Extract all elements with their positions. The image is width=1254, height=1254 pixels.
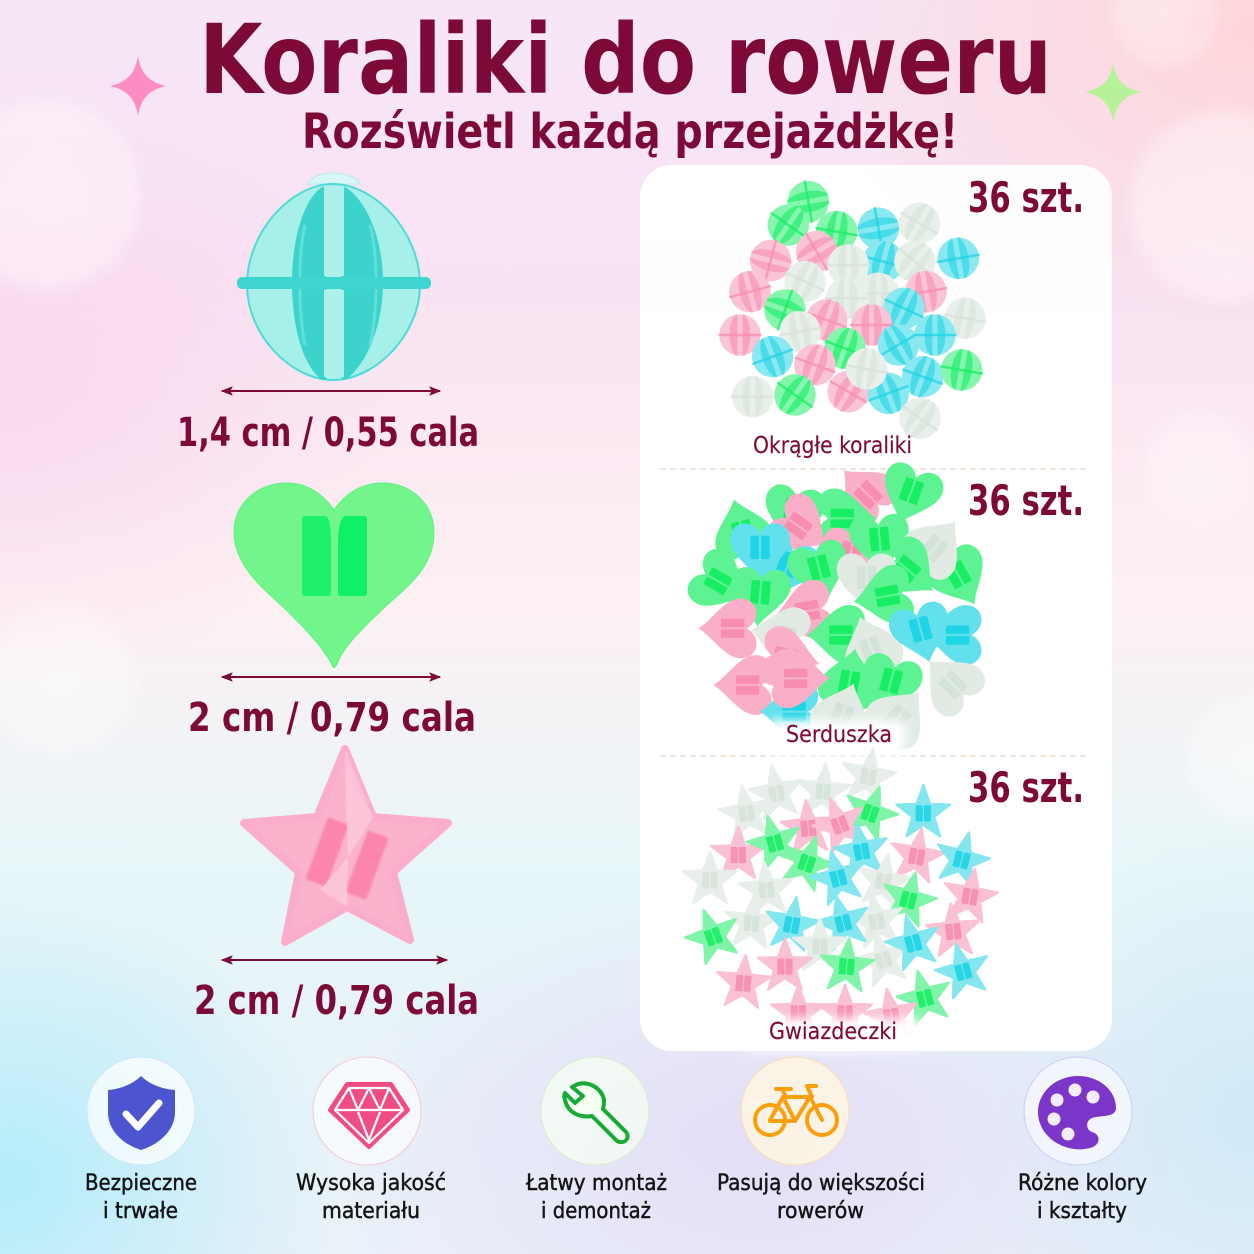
dimension: round bead: 1,4 cm / 0,55 cala xyxy=(177,410,479,456)
icon: bicycle xyxy=(755,1086,837,1135)
label: hearts: Serduszka xyxy=(786,722,892,748)
count: hearts: 36 szt. xyxy=(968,476,1084,525)
caption: safe: Bezpieczne xyxy=(85,1171,197,1196)
label: stars xyxy=(745,1018,920,1051)
arrow: round bead width xyxy=(222,390,440,392)
caption: easy mounting: i demontaż xyxy=(541,1199,651,1224)
icon: shield xyxy=(108,1076,175,1150)
dimension: star: 2 cm / 0,79 cala xyxy=(194,978,479,1024)
icon: palette xyxy=(1038,1076,1116,1149)
feature: quality xyxy=(296,1057,446,1224)
feature: colours and shapes xyxy=(1018,1057,1147,1224)
label: hearts xyxy=(770,720,905,756)
feature: easy mounting xyxy=(525,1057,667,1224)
feature: safe xyxy=(85,1057,197,1224)
subtitle: Rozświetl każdą przejażdżkę! xyxy=(302,104,958,160)
caption: easy mounting: Łatwy montaż xyxy=(525,1171,667,1196)
icon: pink sparkle xyxy=(110,56,166,116)
panel: bead sets xyxy=(640,165,1112,1051)
round bead photo xyxy=(237,173,431,380)
arrow: heart width xyxy=(222,676,440,678)
heart bead photo xyxy=(234,483,434,667)
caption: quality: materiału xyxy=(322,1199,420,1224)
caption: quality: Wysoka jakość xyxy=(296,1171,446,1196)
pile: stars xyxy=(678,744,1002,1044)
pile: hearts xyxy=(682,449,1001,756)
dimension: heart: 2 cm / 0,79 cala xyxy=(188,695,476,741)
caption: colours and shapes: i kształty xyxy=(1037,1199,1127,1224)
icon: wrench xyxy=(564,1083,628,1142)
pile: round beads xyxy=(718,177,990,448)
feature: fits most bikes xyxy=(717,1057,925,1224)
label: round beads: Okrągłe koraliki xyxy=(753,433,912,459)
count: stars: 36 szt. xyxy=(968,763,1084,812)
count: round beads: 36 szt. xyxy=(968,173,1084,222)
caption: fits most bikes: Pasują do większości xyxy=(717,1171,925,1196)
caption: safe: i trwałe xyxy=(103,1199,178,1224)
star bead photo xyxy=(244,749,448,942)
title: Koraliki do roweru xyxy=(199,4,1052,116)
caption: colours and shapes: Różne kolory xyxy=(1018,1171,1147,1196)
arrow: star width xyxy=(222,959,447,961)
icon: diamond xyxy=(330,1084,408,1147)
label: stars: Gwiazdeczki xyxy=(769,1019,897,1045)
icon: green sparkle xyxy=(1085,63,1141,122)
caption: fits most bikes: rowerów xyxy=(777,1199,864,1224)
